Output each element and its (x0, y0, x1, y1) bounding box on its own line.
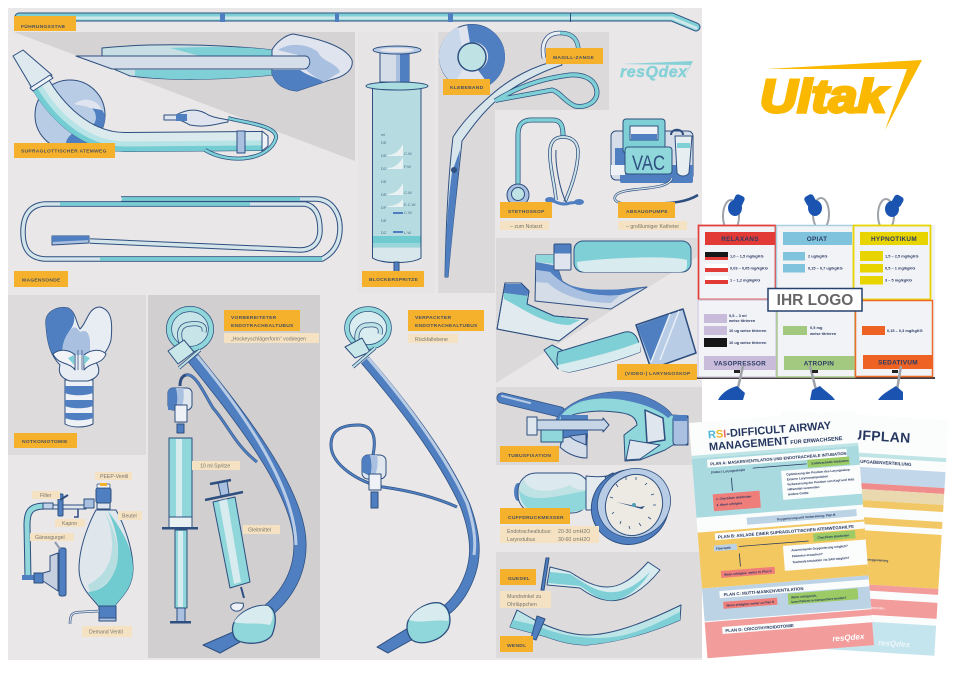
lanyard: rings and pins top (723, 193, 905, 232)
card section: Vasopressor: 0,5 – 3 ml (729, 313, 747, 318)
panel: Absaugpumpe (611, 119, 698, 230)
note: Mundwinkel zu Ohrläppchen: Ohrläppchen (507, 602, 537, 608)
plan C: kann Patient re-transportiert werden? (791, 596, 847, 604)
note: Rückfallebene: Rückfallebene (415, 337, 448, 343)
label: Beutel: Beutel (122, 514, 137, 520)
card section: Relaxans: RELAXANS (721, 236, 759, 243)
illustration: larynx and trachea (46, 307, 112, 427)
label: Supraglottischer Atemweg (14, 143, 115, 158)
card section: Sedativum: SEDATIVUM (878, 360, 918, 366)
oxygenation pill: Oxygenierung und Vorbereitung: Plan B (777, 513, 836, 521)
label: Tubusfixation (500, 446, 559, 462)
label: PEEP-Ventil (95, 472, 132, 480)
syringe scale: E.C.W (404, 202, 416, 207)
note: Mundwinkel zu Ohrläppchen: Mundwinkel zu (507, 594, 541, 600)
card section: Opiat: 0,15 – 0,7 ug/kgKG (808, 266, 843, 270)
panel: Cuffdruckmesser (500, 457, 682, 557)
note: pressure values: Larynxtubus (507, 537, 536, 543)
note: Hockeyschlägerform: „Hockeyschlägerform“ vorbiegen (231, 336, 306, 342)
label: Filter (32, 491, 60, 499)
label: (Video-) Laryngoskop (617, 364, 697, 380)
syringe scale: DE (381, 153, 387, 158)
label: Guedel (500, 569, 536, 585)
poster board background (8, 8, 702, 660)
card section: Sedativum (856, 300, 933, 376)
syringe scale: DZ (381, 166, 387, 171)
plan C (702, 575, 871, 621)
card section: Atropin (777, 300, 855, 377)
panel: Supraglottischer Atemweg (13, 34, 352, 159)
plan B: Wenn erfolglos: weiter zu Plan C (724, 569, 773, 577)
illustration: stethoscope (507, 120, 584, 206)
label: Vorbereiteter Endotrachealtubus: ENDOTRACHEALTUBUS (231, 323, 294, 329)
label: Notkoniotomie: NOTKONIOTOMIE (22, 439, 68, 445)
illustration: laryngeal mask airway (13, 50, 276, 159)
syringe scale: DF (381, 205, 387, 210)
card section: Atropin: weise titrieren (809, 331, 837, 336)
note: pressure values: 30-60 cmH2O (558, 537, 590, 543)
card section: Atropin: ATROPIN (804, 360, 834, 368)
illustration: Guedel airway (541, 558, 660, 601)
label: Magill-Zange: MAGILL-ZANGE (553, 55, 595, 61)
syringe scale: F.W (404, 164, 411, 169)
card section: Vasopressor: 10 ug weise titrieren (729, 328, 767, 333)
panel: Notkoniotomie (14, 307, 112, 448)
illustration: bag valve mask (22, 483, 133, 624)
label: Demand Ventil (82, 626, 132, 637)
note: Mundwinkel zu Ohrläppchen (500, 591, 551, 608)
card section: Hypnotikum: 1,5 – 2,5 mg/kgKG (885, 254, 919, 258)
icon: top-left pin (723, 193, 746, 232)
icon: top-middle pin (803, 193, 829, 230)
label: Wendl: WENDL (507, 643, 526, 649)
syringe scale (381, 132, 416, 235)
drug dosing card (697, 225, 935, 379)
plan D: PLAN D: CRICOTHYROIDOTOMIE (725, 623, 794, 633)
poster title (708, 419, 843, 453)
card section: Hypnotikum (854, 226, 930, 300)
card section: Vasopressor: VASOPRESSOR (714, 360, 766, 368)
syringe scale: C.W (404, 210, 412, 215)
back poster: Ablaufplan: Ablauf beenden (860, 605, 885, 611)
plan C: PLAN C: MUTTI-MASKENVENTILATION (723, 586, 804, 597)
card section: Hypnotikum: 3 – 5 mg/kgKG (885, 278, 912, 282)
plan A: Endotracheale Intubation (811, 459, 849, 466)
label: Kapno (55, 519, 85, 527)
illustration: video laryngoscope (544, 309, 696, 372)
panel: Führungsstab (14, 13, 696, 31)
syringe scale: C.W (404, 151, 412, 156)
plan B: PLAN B: ANLAGE EINER SUPRAGLOTTISCHEN ATEMWEGSHILFE (718, 524, 854, 540)
label: 10 ml Spritze (192, 461, 240, 470)
illustration: packaged tube (331, 309, 475, 653)
label: Magensonde (14, 271, 68, 287)
panel: Magensonde (14, 199, 340, 287)
label: Notkoniotomie (14, 433, 77, 448)
label: Demand Ventil: Demand Ventil (89, 630, 123, 636)
label: Supraglottischer Atemweg: SUPRAGLOTTISCHER ATEMWEG (21, 148, 107, 154)
plan B: Tracheale Intubation via SAD möglich? (792, 556, 850, 564)
plan B: Ausreichende Oxygenierung möglich? (791, 544, 848, 552)
label: Klebeband: KLEBEBAND (450, 85, 484, 91)
icon: bottom-right pin (878, 366, 903, 400)
illustration: cuff pressure gauge (514, 457, 682, 557)
note: pressure values: 20-30 cmH2O (558, 529, 590, 535)
plan B: Fiberoptik (716, 546, 731, 551)
plan A: Externe Larynxmanipulation (787, 474, 828, 481)
illustration: guide rod (19, 13, 696, 28)
note: pressure values (500, 526, 599, 543)
card section: Atropin: 0,5 mg (810, 325, 823, 330)
syringe scale: DE (381, 218, 387, 223)
illustration: syringe (366, 46, 428, 272)
label: Gänsegurgel: Gänsegurgel (35, 535, 65, 541)
label: Cuffdruckmesser (500, 508, 570, 524)
note: Rückfallebene (408, 334, 458, 343)
card section: Opiat: OPIAT (807, 236, 827, 243)
label: (Video-) Laryngoskop: (VIDEO-) LARYNGOSKOP (625, 371, 691, 377)
label: 10 ml Spritze: 10 ml Spritze (200, 464, 230, 470)
plan A: Optimierung der Position des Laryngoskop (786, 468, 850, 477)
plan B: Checkliste abarbeiten (817, 533, 850, 540)
label: Blockerspritze: BLOCKERSPRITZE (369, 277, 418, 283)
lanyard: rings and pins bottom (718, 366, 903, 400)
back poster: Ablaufplan: resQdex (878, 638, 911, 649)
label: Gänsegurgel (30, 533, 74, 541)
syringe scale: L.W (404, 230, 411, 235)
illustration: tape roll (439, 24, 505, 90)
label: Absaugpumpe: ABSAUGPUMPE (626, 209, 668, 215)
illustration: prepared tube with stylet (162, 309, 300, 653)
card section: Vasopressor (698, 300, 776, 377)
illustration: tube fixation device (502, 392, 688, 461)
label: Vorbereiteter Endotrachealtubus: VORBEREITETER (231, 315, 277, 321)
label: Beutel (118, 511, 142, 520)
card section: Vasopressor: 10 ug weise titrieren (729, 340, 767, 345)
syringe scale: DZ (381, 230, 387, 235)
plan A: 2. Wenn erfolglos (716, 501, 743, 507)
plan B (698, 520, 869, 588)
label: Gleitmittel (243, 525, 280, 534)
label: Führungsstab (14, 16, 76, 31)
illustration: suction pump: VAC (632, 152, 665, 175)
syringe scale: C.W (404, 190, 412, 195)
syringe scale: ml (381, 132, 385, 137)
illustration: second laryngoscope blade (497, 283, 588, 341)
label: Tubusfixation: TUBUSFIXATION (508, 453, 551, 459)
front poster: RSI-Difficult Airway Management (689, 410, 874, 658)
plan D (705, 609, 874, 658)
panel: Stethoskop (500, 120, 584, 230)
card section: Vasopressor: weise titrieren (728, 318, 756, 323)
icon: bottom-middle pin (810, 366, 835, 400)
label: Filter: Filter (40, 493, 52, 499)
plan A: 1. Checkliste abarbeiten (716, 494, 752, 501)
panel: Vorbereiteter Endotrachealtubus (162, 309, 319, 653)
plan A: (Video-) Laryngoskopie (711, 468, 746, 474)
plan A: Andere Größe (788, 491, 809, 496)
label: Magensonde: MAGENSONDE (22, 278, 61, 284)
label: Magill-Zange (546, 48, 603, 64)
illustration: packaged laryngeal mask (76, 34, 352, 91)
plan A (692, 446, 863, 518)
label: PEEP-Ventil: PEEP-Ventil (100, 474, 128, 480)
panel: Klebeband (439, 24, 505, 95)
poster title: RSI-DIFFICULT AIRWAY (708, 420, 832, 442)
panel: (Video-) Laryngoskop (497, 241, 697, 380)
card section: Hypnotikum: HYPNOTIKUM (871, 236, 917, 243)
panel: Guedel (500, 558, 681, 652)
plan A: Verbesserung der Position von Kopf und Hals (787, 477, 855, 486)
panel: Blockerspritze (362, 46, 428, 287)
back poster: Ablaufplan: AUFGABENVERTEILUNG (857, 459, 912, 467)
label: Verpackter Endotrachealtubus (408, 310, 484, 331)
card section: Relaxans: 1 – 1,2 mg/kgKG (730, 278, 760, 282)
card section: Relaxans: 0,03 – 0,05 mg/kgKG (730, 266, 768, 270)
panel: Tubusfixation (500, 392, 688, 462)
card section: Sedativum: 0,15 – 0,3 mg/kgKG (887, 328, 923, 333)
icon: bottom-left pin (718, 366, 745, 400)
label: Stethoskop: STETHOSKOP (508, 209, 545, 215)
back poster: Ablaufplan: Präoxygenierung (863, 557, 888, 563)
note: pressure values: Endotrachealtubus: (507, 529, 552, 535)
syringe scale: DE (381, 140, 387, 145)
label: Cuffdruckmesser: CUFFDRUCKMESSER (508, 515, 564, 521)
Ultak logo: Ultak (760, 70, 889, 122)
label: Guedel: GUEDEL (508, 576, 530, 582)
card section: Hypnotikum: 0,5 – 1 mg/kgKG (885, 266, 915, 270)
label: Führungsstab: FÜHRUNGSSTAB (21, 23, 65, 30)
label: Wendl (500, 636, 533, 652)
oxygenation pill (747, 509, 857, 525)
label: Kapno: Kapno (62, 521, 77, 527)
syringe scale: DE (381, 192, 387, 197)
illustration: laryngoscope handle with curved blade (535, 241, 691, 309)
illustration: gastric tube (23, 199, 340, 259)
note: Hockeyschlägerform (224, 333, 319, 343)
syringe scale: DE (381, 179, 387, 184)
panel: Beatmungsbeutel (22, 472, 142, 637)
plan A: PLAN A: MASKENVENTILATION UND ENDOTRACHEALE INTUBATION (710, 451, 847, 466)
logo placeholder (768, 288, 862, 311)
plan C: Wenn erfolgreich, (791, 593, 817, 600)
poster title: MANAGEMENT FÜR ERWACHSENE (709, 431, 843, 453)
label: Gleitmittel: Gleitmittel (248, 528, 271, 534)
card section: Opiat: 2 ug/kgKG (808, 254, 827, 258)
logo placeholder: IHR LOGO (777, 292, 853, 309)
illustration: Magill forceps (445, 33, 597, 277)
icon: top-right pin (878, 194, 905, 231)
label: Blockerspritze (362, 271, 424, 287)
card section: Opiat (776, 226, 854, 300)
card section: Relaxans (698, 226, 776, 300)
card section: Relaxans: 1,0 – 1,5 mg/kgKG (730, 254, 764, 258)
plan D: resQdex (832, 632, 865, 643)
Ultak logo (760, 60, 922, 130)
illustration: Wendl tube (510, 605, 681, 645)
label: Vorbereiteter Endotrachealtubus (224, 310, 300, 331)
note: großlumiger Katheter: – großlumiger Katheter (626, 224, 679, 230)
plan C: Wenn erfolglos: weiter zu Plan D (726, 600, 775, 608)
panel: Magill-Zange (445, 33, 603, 277)
panel: Verpackter Endotrachealtubus (331, 309, 484, 653)
resQdex logo: resQdex (620, 64, 688, 81)
plan A: Hilfsmittel verwenden (787, 485, 820, 491)
label: Verpackter Endotrachealtubus: ENDOTRACHEALTUBUS (415, 323, 478, 329)
back poster: Ablaufplan (768, 410, 949, 656)
label: Verpackter Endotrachealtubus: VERPACKTER (415, 315, 451, 321)
back poster: Ablaufplan: ABLAUFPLAN (812, 424, 911, 446)
note: zum Notarzt: – zum Notarzt (510, 224, 543, 230)
plan B: Patienten erwachen? (792, 552, 823, 558)
